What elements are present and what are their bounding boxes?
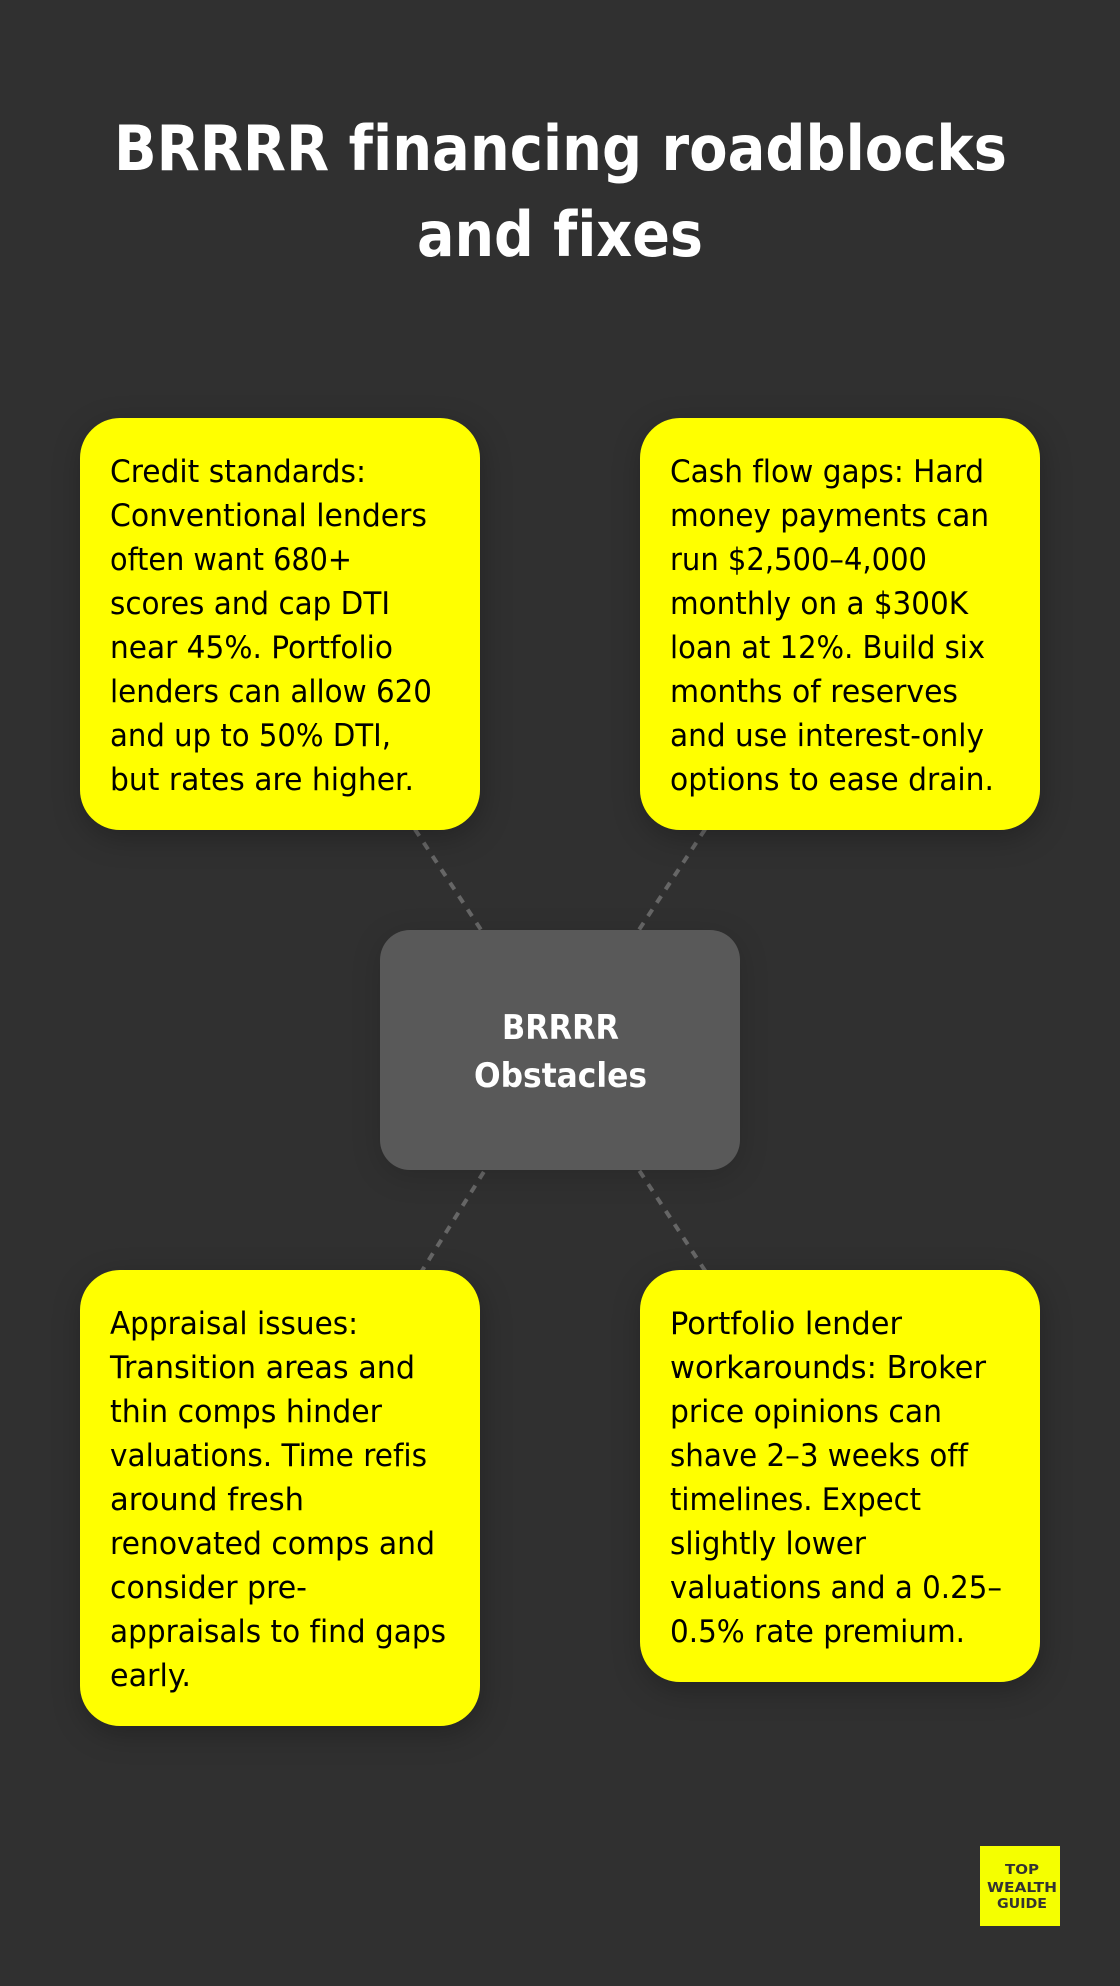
panel: credit standards: scores and cap DTI [110, 586, 390, 622]
panel: appraisal issues: valuations. Time refis [110, 1438, 427, 1474]
title [114, 112, 1007, 271]
panel: appraisal issues: thin comps hinder [110, 1394, 382, 1430]
panel: cash flow gaps [640, 418, 1040, 830]
panel: credit standards: near 45%. Portfolio [110, 630, 393, 666]
panel: portfolio lender workarounds [640, 1270, 1040, 1682]
panel: portfolio lender workarounds: valuations and a 0.25– [670, 1570, 1002, 1606]
panel: appraisal issues: Transition areas and [109, 1350, 415, 1386]
panel: credit standards: Credit standards: [110, 454, 366, 490]
panel: appraisal issues: appraisals to find gaps [110, 1614, 446, 1650]
panel: cash flow gaps: months of reserves [670, 674, 958, 710]
panel: portfolio lender workarounds: Portfolio lender [670, 1306, 902, 1342]
panel: credit standards: lenders can allow 620 [110, 674, 432, 710]
panel: credit standards: and up to 50% DTI, [110, 718, 391, 754]
panel: cash flow gaps: money payments can [670, 498, 989, 534]
panel: center obstacles box [380, 930, 740, 1170]
panel: cash flow gaps: options to ease drain. [670, 762, 994, 798]
panel: appraisal issues: early. [110, 1658, 191, 1694]
panel: cash flow gaps: monthly on a $300K [670, 586, 969, 622]
panel: appraisal issues [80, 1270, 480, 1726]
panel: credit standards [80, 418, 480, 830]
panel: portfolio lender workarounds: timelines. Expect [670, 1482, 921, 1518]
panel: appraisal issues: renovated comps and [110, 1526, 435, 1562]
panel: center obstacles box: Obstacles [474, 1056, 647, 1095]
panel: credit standards: but rates are higher. [110, 762, 414, 798]
panel: appraisal issues: consider pre- [110, 1570, 307, 1606]
panel: credit standards: Conventional lenders [110, 498, 427, 534]
panel: cash flow gaps: loan at 12%. Build six [670, 630, 985, 666]
title: and fixes [417, 198, 703, 271]
panel: credit standards: often want 680+ [110, 542, 352, 578]
panel: cash flow gaps: run $2,500–4,000 [670, 542, 927, 578]
logo: Top Wealth Guide [980, 1846, 1060, 1926]
panel: portfolio lender workarounds: 0.5% rate premium. [670, 1614, 965, 1650]
panel: portfolio lender workarounds: shave 2–3 weeks off [670, 1438, 969, 1474]
panel: appraisal issues: Appraisal issues: [110, 1306, 358, 1342]
panel: portfolio lender workarounds: price opinions can [670, 1394, 942, 1430]
panel: cash flow gaps: and use interest-only [670, 718, 984, 754]
title: BRRRR financing roadblocks [114, 112, 1007, 185]
panel: cash flow gaps: Cash flow gaps: Hard [670, 454, 984, 490]
connector lines [280, 624, 840, 1498]
logo: Top Wealth Guide: TOP [1005, 1862, 1039, 1878]
logo: Top Wealth Guide: WEALTH [987, 1880, 1057, 1896]
logo: Top Wealth Guide: GUIDE [997, 1896, 1047, 1912]
panel: portfolio lender workarounds: slightly lower [670, 1526, 866, 1562]
panel: portfolio lender workarounds: workarounds: Broker [670, 1350, 986, 1386]
panel: center obstacles box: BRRRR [502, 1008, 619, 1047]
panel: appraisal issues: around fresh [110, 1482, 304, 1518]
